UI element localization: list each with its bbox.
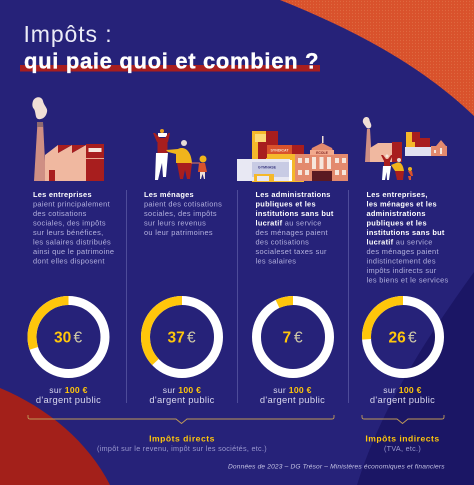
donut: 30 euros	[32, 300, 105, 374]
caption: 30 euros: d'argent public	[36, 394, 101, 405]
caption: 7 euros: d'argent public	[260, 394, 325, 405]
small buildings	[406, 132, 420, 156]
text: tous les agents: des ménages paient	[366, 247, 439, 256]
text: tous les agents: publiques et les	[366, 218, 427, 228]
donut: 37 euros: €	[187, 330, 196, 346]
text: les entreprises: sur leurs bénéfices,	[33, 228, 103, 237]
tall yellow block	[252, 131, 278, 182]
source note: Données de 2023 – DG Trésor – Ministères économiques et financiers	[228, 464, 445, 470]
title	[20, 21, 320, 74]
smoke	[32, 97, 47, 119]
title highlight bar	[20, 65, 320, 72]
text: les ménages	[144, 190, 222, 237]
caption: 37 euros: d'argent public	[149, 394, 215, 405]
factory red wing	[86, 144, 104, 181]
donut: 26 euros: 26	[388, 330, 406, 346]
label: direct taxes: Impôts directs	[149, 434, 215, 444]
school	[295, 143, 348, 181]
icon: public buildings: ECOLE	[316, 151, 329, 155]
factory hall	[45, 145, 86, 181]
text: les administrations	[256, 190, 334, 266]
title line two: qui paie quoi et combien ?	[24, 48, 319, 74]
text: les ménages: Les ménages	[144, 190, 194, 199]
text: les entreprises: des cotisations	[33, 209, 87, 218]
text: les entreprises: sociales, des impôts	[33, 218, 106, 228]
caption: 7 euros: sur 100 €	[273, 385, 312, 395]
syndicat block	[267, 145, 304, 182]
donut: 30 euros: 30	[54, 330, 71, 346]
shape: dark navy corner	[357, 272, 474, 485]
text: les entreprises: dont elles disposent	[33, 256, 105, 266]
label: direct taxes: (impôt sur le revenu, impôt sur les sociétés, etc.)	[97, 444, 267, 453]
icon: factory	[32, 97, 104, 181]
label: indirect taxes: (TVA, etc.)	[384, 444, 421, 453]
donut: 7 euros: 7	[282, 330, 291, 346]
caption: 26 euros	[370, 385, 435, 405]
caption: 37 euros	[149, 385, 215, 405]
text: les administrations: des ménages paient	[256, 228, 328, 237]
text: tous les agents: institutions sans but	[366, 228, 445, 237]
text: les entreprises: Les entreprises	[33, 190, 92, 199]
bracket: indirect taxes	[362, 415, 444, 424]
text: tous les agents: Les entreprises,	[366, 190, 428, 199]
text: les administrations: publiques et les	[256, 200, 316, 208]
gymnase block	[237, 159, 290, 181]
icon: family	[153, 129, 207, 180]
text: les administrations: les salaires	[256, 256, 296, 266]
text: les administrations: socialeset taxes sur	[256, 247, 327, 256]
donut: 7 euros: €	[294, 330, 303, 346]
icon: all payers combined	[363, 117, 447, 180]
text: tous les agents: indistinctement des	[366, 256, 436, 266]
label: indirect taxes	[365, 434, 440, 453]
text: tous les agents: administrations	[366, 209, 426, 218]
icon: public buildings: GYMNASE	[258, 166, 277, 170]
shape: orange corner	[280, 0, 474, 116]
text: les entreprises	[33, 190, 114, 266]
donut: 30 euros: €	[74, 330, 82, 346]
chimney	[34, 122, 46, 181]
small chimney	[365, 129, 372, 162]
text: les administrations: institutions sans but	[256, 209, 334, 218]
text: les administrations: Les administrations	[256, 190, 331, 199]
donut: 7 euros	[256, 300, 330, 374]
text: les entreprises: les salaires distribués	[33, 238, 111, 246]
caption: 26 euros: d'argent public	[370, 394, 435, 405]
donut: 37 euros	[146, 300, 218, 374]
text: tous les agents: les biens et le services	[366, 276, 449, 284]
column dividers	[126, 190, 348, 403]
text: les ménages: paient des cotisations	[144, 200, 222, 208]
adult in yellow	[166, 140, 192, 179]
text: les administrations: lucratif au service	[256, 218, 322, 228]
caption: 30 euros	[36, 385, 101, 405]
bracket: direct taxes	[28, 415, 334, 424]
label: direct taxes	[97, 434, 267, 453]
shape: red corner	[0, 388, 110, 485]
text: les ménages: sur leurs revenus	[144, 218, 206, 228]
small smoke	[363, 117, 371, 128]
text: les entreprises: paient principalement	[33, 200, 110, 208]
caption: 7 euros	[260, 385, 325, 405]
text: les entreprises: ainsi que le patrimoine	[33, 247, 114, 256]
text: tous les agents: les ménages et les	[366, 200, 437, 208]
text: les ménages: ou leur patrimoines	[144, 228, 213, 237]
text: tous les agents: lucratif au service	[366, 238, 433, 246]
caption: 26 euros: sur 100 €	[383, 385, 422, 395]
icon: public buildings: SYNDICAT	[270, 148, 289, 152]
small factory	[370, 143, 402, 162]
factory roof shadows	[58, 145, 86, 153]
donut: 26 euros	[366, 300, 440, 374]
child	[191, 156, 207, 179]
caption: 37 euros: sur 100 €	[163, 385, 201, 395]
label: indirect taxes: Impôts indirects	[365, 434, 440, 444]
title line one: Impôts :	[24, 21, 113, 47]
text: les ménages: sociales, des impôts	[144, 209, 217, 218]
small family	[381, 155, 393, 161]
factory door	[49, 170, 55, 181]
text: tous les agents: impôts indirects sur	[366, 266, 437, 275]
text: les administrations: des cotisations	[256, 238, 309, 246]
text: tous les agents	[366, 190, 449, 284]
caption: 30 euros: sur 100 €	[49, 385, 88, 395]
donut: 26 euros: €	[408, 330, 417, 346]
adult with child on shoulders	[153, 129, 170, 180]
donut: 37 euros: 37	[168, 330, 185, 346]
icon: public buildings	[237, 131, 348, 182]
